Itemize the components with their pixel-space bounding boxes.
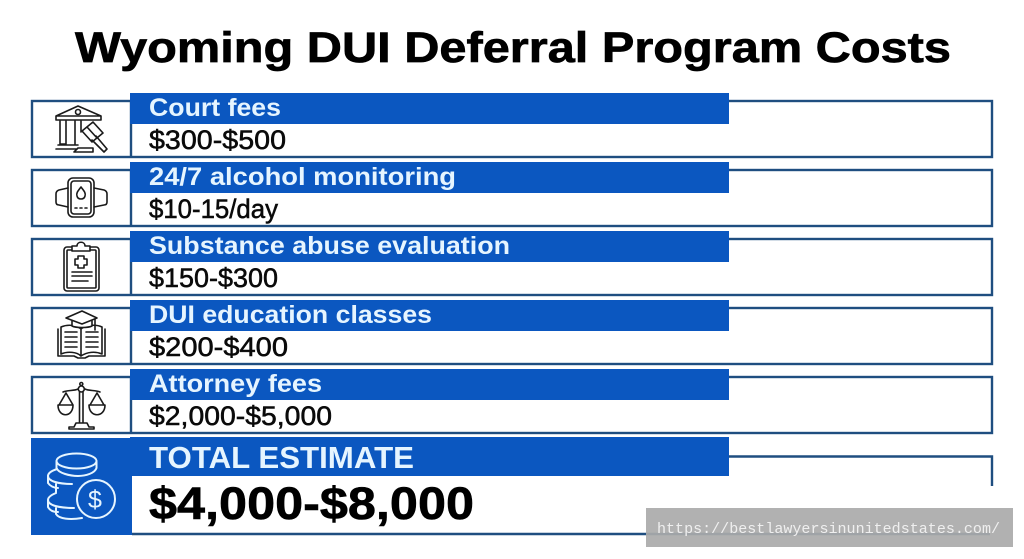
panel: DUI education classes [32,300,992,364]
panel: 24/7 alcohol monitoring [32,162,992,226]
value: attorney fees: $2,000-$5,000 [149,401,332,431]
heading: court fees: Court fees [149,94,281,122]
title: Wyoming DUI Deferral Program Costs [75,24,951,72]
watermark: website url: https://bestlawyersinunitedstates.com/ [657,522,1000,538]
value: DUI education classes: $200-$400 [149,332,288,362]
watermark: website url [646,508,1013,547]
icon: scales of justice [58,382,105,429]
heading: substance abuse evaluation: Substance abuse evaluation [149,232,510,260]
value: substance abuse evaluation: $150-$300 [149,263,278,293]
icon: alcohol monitoring wristband [56,178,107,217]
icon: book and graduation cap [58,311,105,358]
dollar sign in coin: $ [88,486,102,514]
heading: DUI education classes: DUI education classes [149,301,432,329]
heading: attorney fees: Attorney fees [149,370,322,398]
heading: total estimate: TOTAL ESTIMATE [149,440,414,475]
panel: substance abuse evaluation [32,231,992,295]
value: court fees: $300-$500 [149,125,286,155]
icon: medical clipboard [64,242,99,291]
heading: 24/7 alcohol monitoring: 24/7 alcohol monitoring [149,163,456,191]
value: total estimate: $4,000-$8,000 [149,478,474,529]
value: 24/7 alcohol monitoring: $10-15/day [149,194,278,224]
icon: coin stack with dollar [48,454,115,519]
panel: total estimate [31,437,992,535]
icon: courthouse and gavel [56,106,107,152]
panel: attorney fees [32,369,992,433]
panel: court fees [32,93,992,157]
